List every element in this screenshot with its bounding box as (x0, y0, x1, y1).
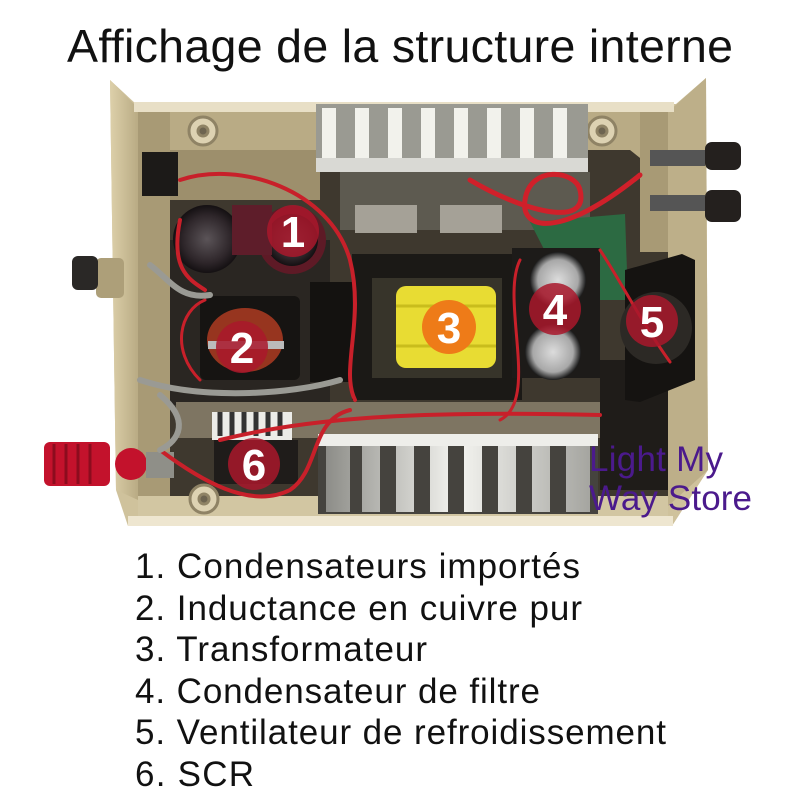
copper inductor (200, 282, 354, 382)
left switch (142, 152, 178, 196)
main circuit dark area (170, 240, 330, 405)
device enclosure photo (44, 78, 741, 526)
store watermark: Way Store (589, 479, 752, 518)
number badge 2 (216, 321, 268, 373)
number badge 6: 6 (242, 441, 266, 490)
number badge 4 (529, 283, 581, 335)
number badge 1 (267, 205, 319, 257)
component list: 6. SCR (135, 755, 254, 794)
small heatsink (212, 412, 298, 484)
cooling fan (620, 254, 695, 402)
component list (135, 547, 666, 794)
left knob (72, 256, 124, 298)
component list: 4. Condensateur de filtre (135, 672, 540, 711)
screw posts (189, 117, 616, 513)
number badge 1: 1 (281, 208, 305, 257)
number badge 3 (422, 300, 476, 354)
right terminals (650, 142, 741, 222)
transformer (352, 254, 522, 400)
store watermark: Light My (589, 440, 724, 479)
filter capacitors (512, 248, 600, 380)
component list: 3. Transformateur (135, 630, 427, 669)
red terminal (44, 442, 174, 486)
component list: 5. Ventilateur de refroidissement (135, 713, 666, 752)
capacitors group 1 (173, 205, 326, 274)
red and grey wires (140, 174, 670, 496)
number badge 5: 5 (640, 298, 664, 347)
number badge 2: 2 (230, 324, 254, 373)
component list: 1. Condensateurs importés (135, 547, 580, 586)
top heatsink (316, 104, 590, 233)
title: Affichage de la structure interne (67, 20, 733, 72)
green circuit board (530, 214, 628, 300)
enclosure body (110, 78, 708, 526)
component list: 2. Inductance en cuivre pur (135, 589, 582, 628)
number badge 5 (626, 295, 678, 347)
number badge 3: 3 (437, 304, 461, 353)
number badge 4: 4 (543, 286, 568, 335)
number badge 6 (228, 438, 280, 490)
store watermark (589, 440, 752, 518)
bottom heatsink (318, 434, 598, 514)
